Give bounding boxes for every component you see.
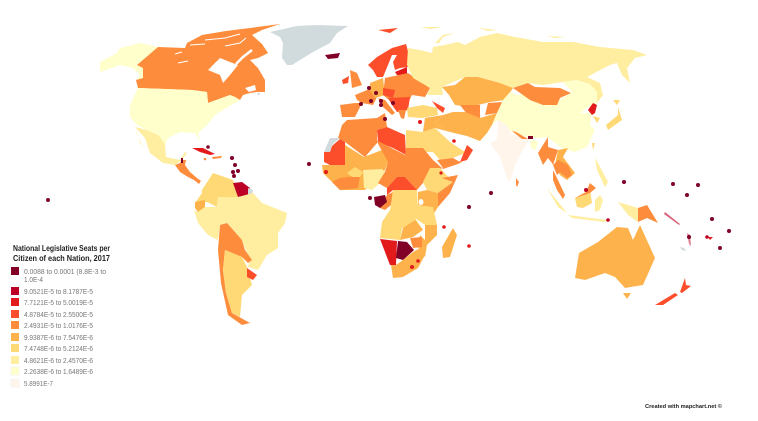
oceania and southeast asian islands: [547, 158, 713, 305]
south america: [194, 173, 287, 325]
legend: [11, 244, 110, 388]
legend row 6: 9.9387E-6 to 7.5476E-6: [24, 333, 93, 342]
asia: [407, 27, 647, 199]
legend row 3: 7.7121E-5 to 5.0019E-5: [24, 298, 93, 307]
legend row 9: 2.2638E-6 to 1.6489E-6: [24, 367, 93, 376]
legend title: National Legislative Seats per: [13, 244, 110, 253]
legend row 10: 5.8991E-7: [24, 379, 53, 388]
greenland: [270, 25, 348, 65]
legend row 7: 7.4748E-6 to 5.2124E-6: [24, 344, 93, 353]
north america: [100, 24, 280, 184]
legend row 4: 4.8784E-5 to 2.5500E-5: [24, 310, 93, 319]
legend title: [13, 244, 110, 263]
legend title: Citizen of each Nation, 2017: [13, 254, 110, 263]
legend row 1: 0.0088 to 0.0001 (8.8E-3 to: [24, 267, 106, 276]
legend row 1: [11, 267, 106, 284]
legend row 5: 2.4931E-5 to 1.0176E-5: [24, 321, 93, 330]
europe: [325, 28, 430, 119]
legend row 10: [11, 379, 53, 388]
legend row 1: 1.0E-4: [24, 275, 43, 284]
africa: [322, 113, 458, 278]
legend row 2: 9.0521E-5 to 8.1787E-5: [24, 287, 93, 296]
small territory markers: [46, 86, 731, 269]
credit: Created with mapchart.net ©: [645, 403, 722, 410]
world map: [46, 24, 731, 325]
legend row 8: 4.8621E-6 to 2.4570E-6: [24, 356, 93, 365]
